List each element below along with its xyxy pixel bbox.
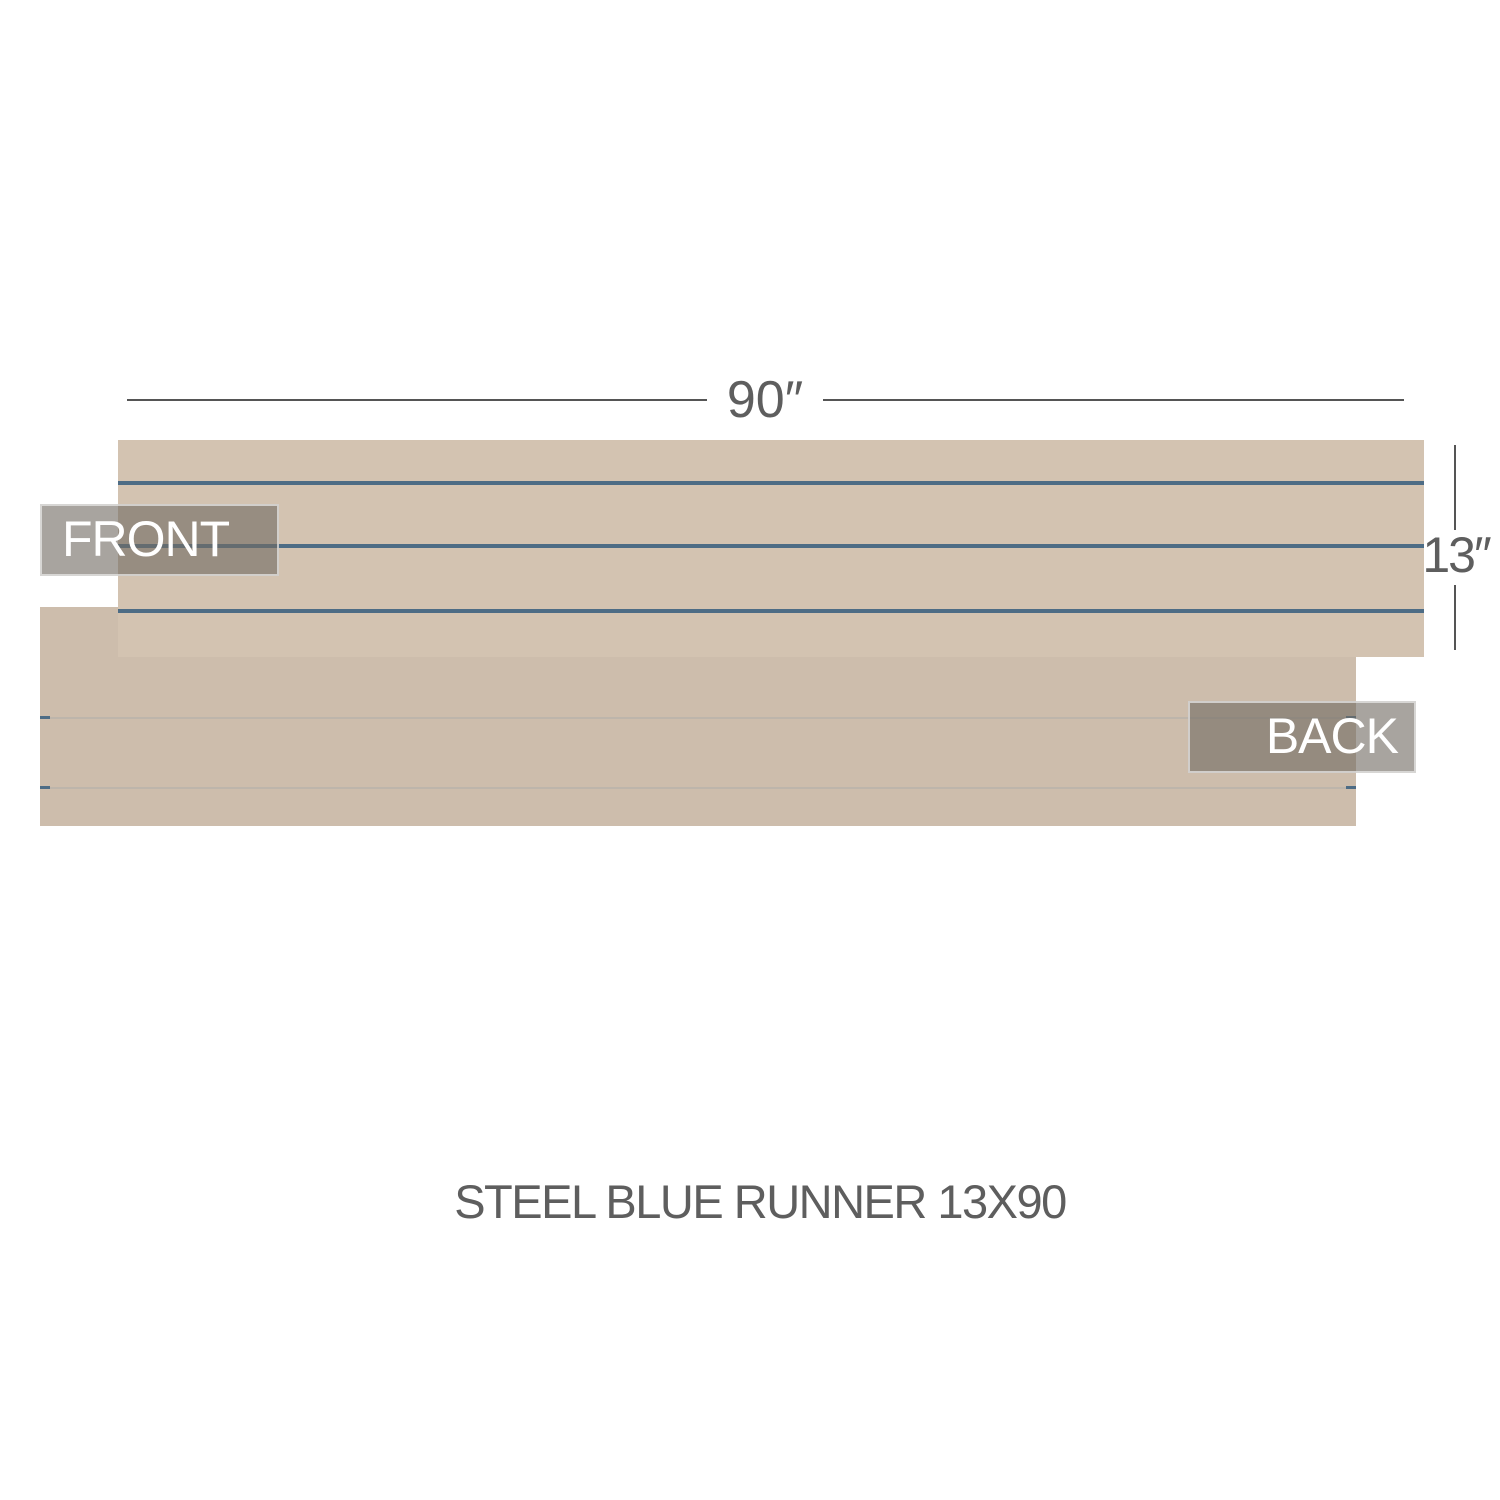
label: BACK bbox=[1188, 701, 1416, 773]
label: FRONT bbox=[40, 504, 279, 576]
title: STEEL BLUE RUNNER 13X90 bbox=[454, 1175, 1066, 1228]
dimension: height 13: 13″ bbox=[1422, 527, 1490, 583]
front runner bbox=[118, 440, 1424, 657]
dimension: width 90: 90″ bbox=[727, 371, 803, 429]
back runner bbox=[40, 607, 1356, 826]
label: FRONT: FRONT bbox=[62, 511, 229, 567]
label: BACK: BACK bbox=[1266, 708, 1398, 764]
